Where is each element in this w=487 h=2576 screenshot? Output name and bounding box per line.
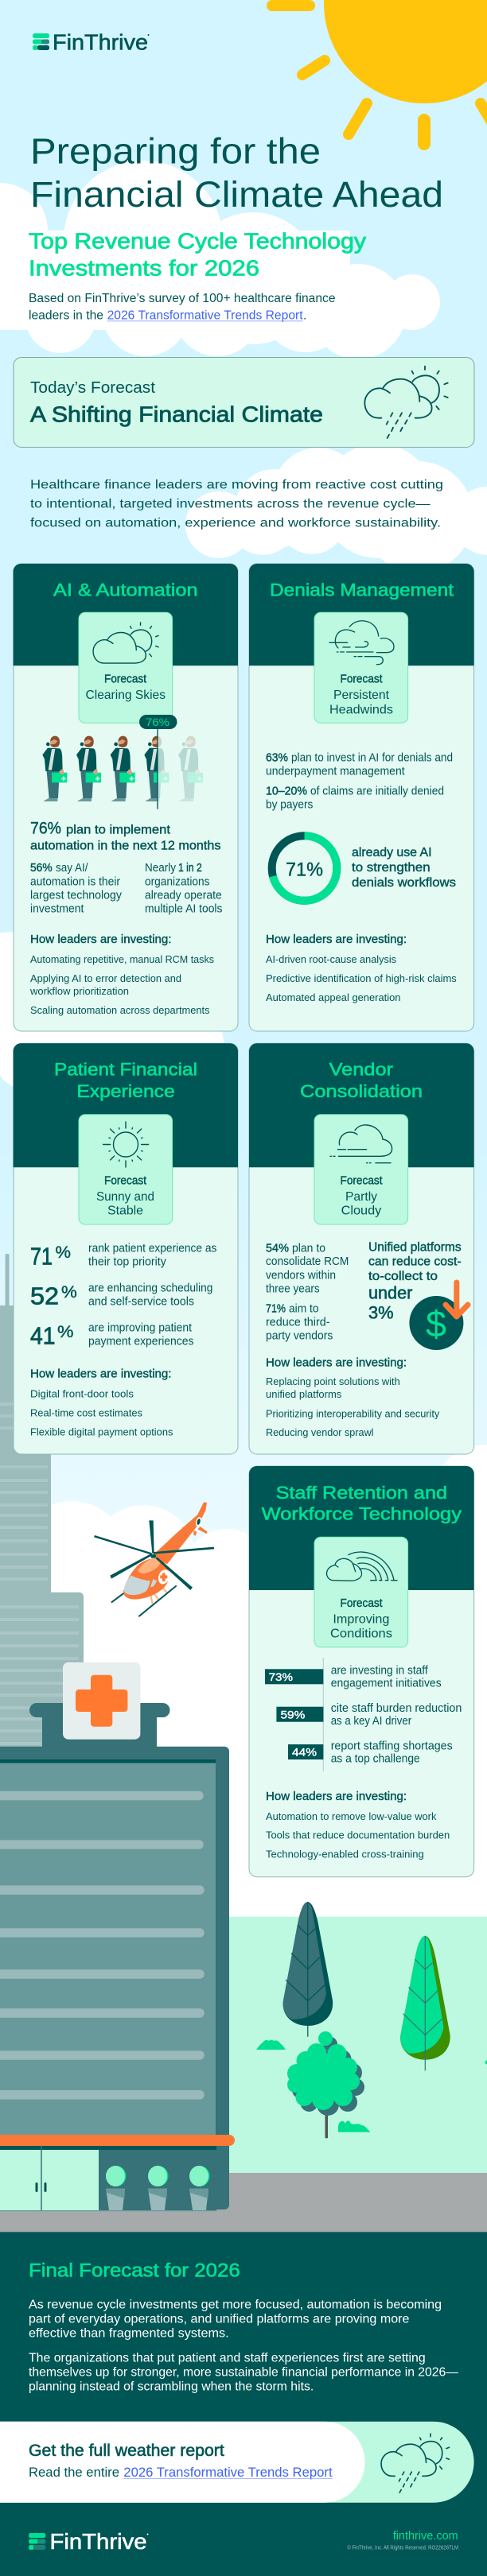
heading: Patient Financial (54, 1060, 197, 1080)
stat: 56% (30, 862, 123, 916)
intro text: leaders in the (29, 309, 103, 323)
stat: 76%: 76% (30, 820, 61, 838)
investing list: AI-driven root-cause analysis (266, 953, 396, 965)
icon: cloud, sun and rain (381, 2434, 449, 2493)
forecast card: Forecast (104, 1174, 146, 1187)
investing list (266, 933, 457, 1003)
investing list: Replacing point solutions with (266, 1375, 400, 1387)
stat: nearly 1 in 2: organizations (145, 875, 210, 888)
donut caption: denials workflows (352, 876, 456, 890)
intro text: 2026 Transformative Trends Report (107, 309, 303, 323)
investing list: unified platforms (266, 1388, 342, 1400)
stat text: 10–20% (266, 785, 307, 797)
stat: 54%: 54% (266, 1242, 289, 1255)
forecast card: Sunny and (96, 1190, 154, 1204)
stat text: by payers (266, 799, 313, 812)
illustration: helicopter (94, 1502, 214, 1616)
investing list: Scaling automation across departments (30, 1004, 210, 1016)
background sky (0, 0, 487, 1590)
stat: 54%: plan to (292, 1242, 325, 1255)
donut caption: to strengthen (352, 861, 431, 875)
stat text: 63% (266, 751, 288, 764)
tree: dark teardrop (283, 1902, 333, 2037)
panel: Vendor Consolidation (249, 1043, 474, 1454)
bar: 44% (288, 1740, 453, 1765)
icon: wind cloud (329, 621, 394, 665)
body paragraph: to intentional, targeted investments across the revenue cycle— (30, 497, 431, 510)
stat: nearly 1 in 2 (145, 862, 223, 916)
investing list: workflow prioritization (29, 985, 129, 997)
investing list: How leaders are investing: (266, 1790, 407, 1803)
panel: today's forecast (14, 358, 474, 447)
heading: Vendor (329, 1060, 394, 1080)
forecast card: Clearing Skies (86, 689, 166, 702)
paragraph 2 (29, 2352, 458, 2394)
tree: round (287, 2031, 364, 2138)
stat: 52%: are enhancing scheduling (88, 1282, 212, 1294)
callout: under 3%: 3% (368, 1302, 393, 1322)
forecast card: Improving (333, 1613, 389, 1627)
stat: 54% (266, 1242, 349, 1295)
stat: 71%: party vendors (266, 1329, 333, 1342)
forecast card (79, 612, 173, 723)
investing list: Tools that reduce documentation burden (266, 1829, 450, 1841)
heading: Final Forecast for 2026 (29, 2260, 240, 2281)
bushes (256, 2040, 487, 2132)
icon: clearing skies (93, 623, 158, 663)
cloud: header (0, 161, 440, 359)
building: tower with antenna (0, 1254, 84, 1749)
stat: 54%: vendors within (266, 1269, 336, 1282)
stat: 56%: say AI/ (56, 862, 88, 875)
investing list: How leaders are investing: (266, 933, 407, 946)
stat: 71%: 71% (266, 1302, 286, 1315)
panel: Patient Financial Experience (13, 1043, 238, 1454)
title: Preparing for the (30, 131, 321, 172)
stat: 56%: investment (30, 903, 84, 916)
forecast card (79, 1115, 173, 1224)
panel: Denials Management (249, 564, 474, 1031)
icon: rainbow and cloud (327, 1552, 397, 1581)
sun (272, 0, 487, 144)
tree: green teardrop (400, 1936, 450, 2070)
paragraph 1: part of everyday operations, and unified platforms are proving more (29, 2312, 410, 2326)
forecast card (314, 1115, 408, 1224)
building: hospital (0, 1662, 235, 2211)
stat: 41%: payment experiences (88, 1336, 194, 1348)
forecast card (314, 1537, 408, 1647)
forecast card (314, 612, 408, 723)
forecast card: Persistent (333, 689, 390, 702)
orange band (0, 2135, 235, 2146)
investing list: Reducing vendor sprawl (266, 1426, 374, 1438)
stat: 54%: consolidate RCM (266, 1255, 349, 1268)
panel: AI & Automation (13, 564, 238, 1031)
bar: 44%: report staffing shortages (331, 1740, 453, 1752)
stat: 41% (30, 1321, 194, 1350)
icon: dollar coin with down arrow: $ (426, 1303, 446, 1344)
icon: cloud, sun and rain (364, 367, 448, 438)
stat text: underpayment management (266, 765, 405, 778)
donut caption (352, 846, 456, 890)
investing list (266, 1790, 450, 1860)
investing list (30, 1368, 173, 1437)
stat: nearly 1 in 2: Nearly (145, 862, 177, 875)
heading (300, 1060, 423, 1101)
callout: under 3%: can reduce cost- (368, 1255, 462, 1269)
icon: partly cloudy (330, 1125, 392, 1163)
icon: sun (103, 1122, 149, 1167)
callout: under 3% (368, 1241, 462, 1322)
investing list: Real-time cost estimates (30, 1406, 142, 1418)
investing list: How leaders are investing: (266, 1356, 407, 1369)
cloud: behind paragraph (185, 444, 487, 572)
building: tower over cloud (0, 1454, 84, 1749)
call to action: 2026 Transformative Trends Report (123, 2465, 333, 2480)
intro text: Based on FinThrive’s survey of 100+ healthcare finance (29, 292, 336, 305)
stat: 54%: three years (266, 1282, 320, 1295)
paragraph 2: The organizations that put patient and staff experiences first are setting (29, 2352, 426, 2365)
donut chart: 71%: 71% (286, 859, 323, 881)
copyright: © FinThrive, Inc. All Rights Reserved. RO22626TLM (347, 2545, 458, 2551)
panel: Staff Retention and Workforce Technology (249, 1466, 474, 1877)
forecast heading: A Shifting Financial Climate (30, 402, 323, 427)
stat: 52%: % (61, 1283, 77, 1302)
logo: FinThrive (53, 30, 148, 54)
intro text: . (303, 309, 306, 323)
investing list: Applying AI to error detection and (30, 972, 181, 984)
stat: 71%: % (56, 1243, 71, 1262)
bar: 59% (276, 1702, 462, 1728)
bar: 59%: as a key AI driver (331, 1715, 411, 1728)
subtitle: Investments for 2026 (29, 256, 259, 281)
stat: 76% (30, 820, 221, 852)
stat: 41%: % (57, 1323, 73, 1341)
paragraph 1 (29, 2298, 442, 2340)
rooftop helipad (29, 1662, 170, 1749)
bar: 44%: as a top challenge (331, 1752, 420, 1765)
stat: 41%: are improving patient (88, 1321, 192, 1334)
icon: dollar coin with down arrow (409, 1282, 468, 1350)
forecast label: Today’s Forecast (30, 379, 155, 397)
stat: nearly 1 in 2: 1 in 2 (178, 862, 202, 875)
heading: AI & Automation (53, 580, 198, 599)
body paragraph: focused on automation, experience and workforce sustainability. (30, 516, 441, 530)
investing list: How leaders are investing: (30, 1368, 172, 1381)
investing list: How leaders are investing: (30, 933, 172, 946)
title (30, 131, 443, 215)
heading: Denials Management (270, 580, 454, 599)
stat: 52% (30, 1282, 212, 1310)
ground: grass (229, 1917, 487, 2174)
stat: nearly 1 in 2: multiple AI tools (145, 903, 223, 916)
call to action: Read the entire (29, 2465, 119, 2480)
footer logo: FinThrive (49, 2529, 146, 2554)
forecast card: Stable (107, 1205, 143, 1218)
investing list: Predictive identification of high-risk claims (266, 972, 457, 984)
paragraph 1: As revenue cycle investments get more focused, automation is becoming (29, 2298, 442, 2311)
forecast card: Conditions (330, 1627, 392, 1640)
investing list (29, 933, 214, 1016)
subtitle: Top Revenue Cycle Technology (29, 229, 366, 254)
stat: 71%: reduce third- (266, 1316, 330, 1329)
bar: 73%: 73% (269, 1670, 293, 1683)
bar: 59%: cite staff burden reduction (331, 1702, 462, 1715)
forecast card: Forecast (341, 1597, 382, 1610)
heading (54, 1060, 197, 1101)
heading: Experience (76, 1081, 175, 1101)
intro text (29, 292, 336, 323)
heading (262, 1483, 462, 1524)
investing list (266, 1356, 440, 1438)
stat: 71%: 71 (30, 1243, 53, 1271)
stat: 56%: 56% (30, 862, 53, 875)
bar: 44%: 44% (292, 1746, 317, 1759)
heading: Workforce Technology (262, 1504, 462, 1524)
bar: 73%: engagement initiatives (331, 1677, 442, 1690)
stat: 56%: automation is their (30, 875, 120, 888)
stat: 56%: largest technology (30, 890, 123, 902)
pictogram: 76 percent of people (42, 715, 203, 809)
planters (106, 2166, 210, 2210)
investing list: Automation to remove low-value work (266, 1810, 437, 1822)
investing list: Technology-enabled cross-training (266, 1849, 424, 1860)
paragraph 1: effective than fragmented systems. (29, 2326, 229, 2340)
bar: 59%: 59% (280, 1708, 305, 1721)
callout: under 3%: to-collect to (368, 1270, 438, 1283)
call to action (0, 2422, 474, 2503)
heading: Consolidation (300, 1081, 423, 1101)
stat text: of claims are initially denied (310, 785, 444, 797)
callout: under 3%: under (368, 1282, 412, 1302)
paragraph 2: themselves up for stronger, more sustainable financial performance in 2026— (29, 2366, 458, 2380)
body paragraph (30, 478, 443, 530)
forecast card: Partly (345, 1190, 377, 1204)
forecast card: Forecast (341, 673, 382, 685)
website: finthrive.com (393, 2529, 458, 2543)
investing list: Automating repetitive, manual RCM tasks (30, 953, 214, 965)
title: Financial Climate Ahead (30, 174, 443, 215)
stat: 52%: and self-service tools (88, 1296, 194, 1309)
stat: 76%: automation in the next 12 months (30, 839, 221, 852)
cloud: behind helicopter (16, 1445, 487, 1924)
forecast card: Headwinds (329, 703, 393, 716)
bar: 73% (265, 1664, 442, 1690)
stat text (266, 751, 453, 812)
stat: 71%: rank patient experience as (88, 1242, 216, 1255)
stat: nearly 1 in 2: already operate (145, 890, 222, 902)
forecast card: Cloudy (341, 1205, 381, 1218)
stat: 71% (30, 1242, 216, 1271)
stat: 41%: 41 (30, 1322, 56, 1350)
paragraph 2: planning instead of scrambling when the storm hits. (29, 2380, 314, 2394)
stat: 71%: aim to (289, 1302, 318, 1315)
stat: 71%: their top priority (88, 1256, 167, 1269)
forecast card: Forecast (341, 1174, 382, 1187)
investing list: Prioritizing interoperability and security (266, 1407, 440, 1419)
panel: final forecast footer (0, 2232, 487, 2576)
bar chart (265, 1658, 462, 1771)
stat: 71% (266, 1302, 333, 1342)
donut caption: already use AI (352, 846, 431, 859)
body paragraph: Healthcare finance leaders are moving from reactive cost cutting (30, 478, 443, 491)
subtitle (29, 229, 366, 281)
call to action: Get the full weather report (29, 2442, 224, 2460)
bar: 73%: are investing in staff (331, 1664, 429, 1677)
heading: Staff Retention and (276, 1483, 447, 1503)
investing list: Digital front-door tools (30, 1387, 134, 1399)
donut chart: 71% (272, 836, 337, 901)
doors (0, 2146, 216, 2211)
investing list: Automated appeal generation (266, 991, 401, 1003)
cloud: behind lower-left cards (0, 930, 225, 1088)
callout: under 3%: Unified platforms (368, 1241, 462, 1255)
stat: 52%: 52 (30, 1282, 59, 1310)
investing list: Flexible digital payment options (30, 1426, 173, 1437)
stat text: plan to invest in AI for denials and (291, 751, 453, 764)
forecast card: Forecast (104, 673, 146, 685)
pictogram: 76 percent of people: 76% (146, 716, 169, 728)
stat: 76%: plan to implement (66, 824, 171, 837)
ground: pavement (0, 2173, 487, 2233)
